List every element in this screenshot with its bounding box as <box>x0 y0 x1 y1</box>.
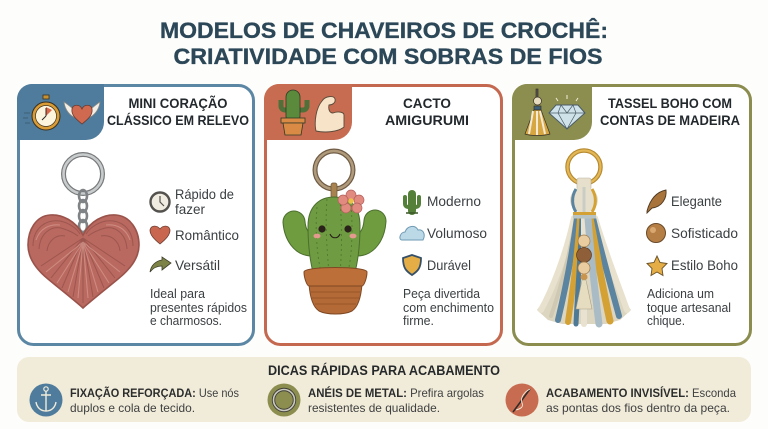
panel: mini coração <box>17 84 254 344</box>
feature: versátil <box>150 257 220 273</box>
heading: tassel <box>600 95 740 128</box>
header tab: tassel <box>512 84 592 140</box>
header tab: cacto <box>264 84 352 140</box>
feature: estilo boho <box>647 256 738 276</box>
heading: mini coração: MINI CORAÇÃO <box>128 94 228 111</box>
tip: fixação reforçada: FIXAÇÃO REFORÇADA: Use nós <box>70 385 239 400</box>
illustration: heart keychain <box>28 154 139 308</box>
feature: rápido de fazer: Rápido de <box>175 186 234 202</box>
description: tassel: toque artesanal <box>647 301 731 315</box>
tip: acabamento invisível: ACABAMENTO INVISÍVEL: Esconda <box>546 385 736 400</box>
illustration: cactus keychain <box>294 151 375 314</box>
title: CRIATIVIDADE COM SOBRAS DE FIOS <box>174 44 602 69</box>
icon: winged heart <box>64 102 100 124</box>
description: cacto <box>403 287 494 328</box>
icon: metal ring <box>268 384 300 416</box>
feature: moderno <box>405 193 481 213</box>
feature: durável: Durável <box>427 257 471 273</box>
panel: cacto amigurumi <box>264 84 502 344</box>
description: tassel <box>647 287 731 328</box>
tip: acabamento invisível: as pontas dos fios dentro da peça. <box>546 401 730 415</box>
heading: cacto: CACTO <box>403 95 451 111</box>
description: cacto: com enchimento <box>403 301 494 315</box>
feature: volumoso <box>400 225 487 241</box>
tip: anéis de metal: resistentes de qualidade. <box>308 401 440 415</box>
description: cacto: Peça divertida <box>403 287 480 301</box>
feature: elegante: Elegante <box>671 193 722 209</box>
heading: dicas: DICAS RÁPIDAS PARA ACABAMENTO <box>268 363 500 378</box>
icon: needle <box>506 384 538 416</box>
tip: anéis de metal: ANÉIS DE METAL: Prefira argolas <box>308 385 484 400</box>
description: mini coração: e charmosos. <box>150 314 222 328</box>
feature: rápido de fazer: fazer <box>175 201 205 217</box>
tip: fixação reforçada <box>30 384 239 416</box>
heading: mini coração <box>107 94 249 128</box>
feature: moderno: Moderno <box>427 193 481 209</box>
icon: diamond <box>549 95 585 129</box>
heading: mini coração: CLÁSSICO EM RELEVO <box>107 112 249 128</box>
feature: durável <box>403 255 471 275</box>
title <box>160 18 608 69</box>
feature: estilo boho: Estilo Boho <box>671 257 738 273</box>
feature: sofisticado <box>646 224 738 242</box>
description: cacto: firme. <box>403 314 434 328</box>
title: MODELOS DE CHAVEIROS DE CROCHÊ: <box>160 18 608 43</box>
feature: romântico: Romântico <box>175 227 239 243</box>
icon: flexed arm <box>315 97 344 132</box>
panel: dicas rápidas <box>17 357 751 422</box>
header tab: mini coração <box>17 84 104 140</box>
icon: anchor <box>30 384 62 416</box>
tip: fixação reforçada: duplos e cola de tecido. <box>70 401 195 415</box>
heading: cacto <box>385 95 469 128</box>
illustration: boho tassel <box>537 150 631 324</box>
tip: acabamento invisível <box>506 384 736 416</box>
heading: tassel: TASSEL BOHO COM <box>608 95 732 111</box>
description: mini coração <box>150 287 247 328</box>
feature: romântico <box>150 226 239 244</box>
feature: elegante <box>647 190 722 213</box>
feature: sofisticado: Sofisticado <box>671 225 738 241</box>
heading: cacto: AMIGURUMI <box>385 112 469 128</box>
heading: tassel: CONTAS DE MADEIRA <box>600 112 740 128</box>
feature: versátil: Versátil <box>175 257 220 273</box>
feature: volumoso: Volumoso <box>427 225 487 241</box>
tip: anéis de metal <box>268 384 484 416</box>
description: tassel: Adiciona um <box>647 287 714 301</box>
description: mini coração: Ideal para <box>150 287 205 301</box>
description: tassel: chique. <box>647 314 685 328</box>
description: mini coração: presentes rápidos <box>150 301 247 315</box>
panel: tassel boho <box>512 84 750 344</box>
icon: small cactus <box>281 90 307 135</box>
feature: rápido de fazer <box>150 186 234 217</box>
icon: stopwatch <box>23 95 60 130</box>
icon: small tassel <box>525 89 550 136</box>
